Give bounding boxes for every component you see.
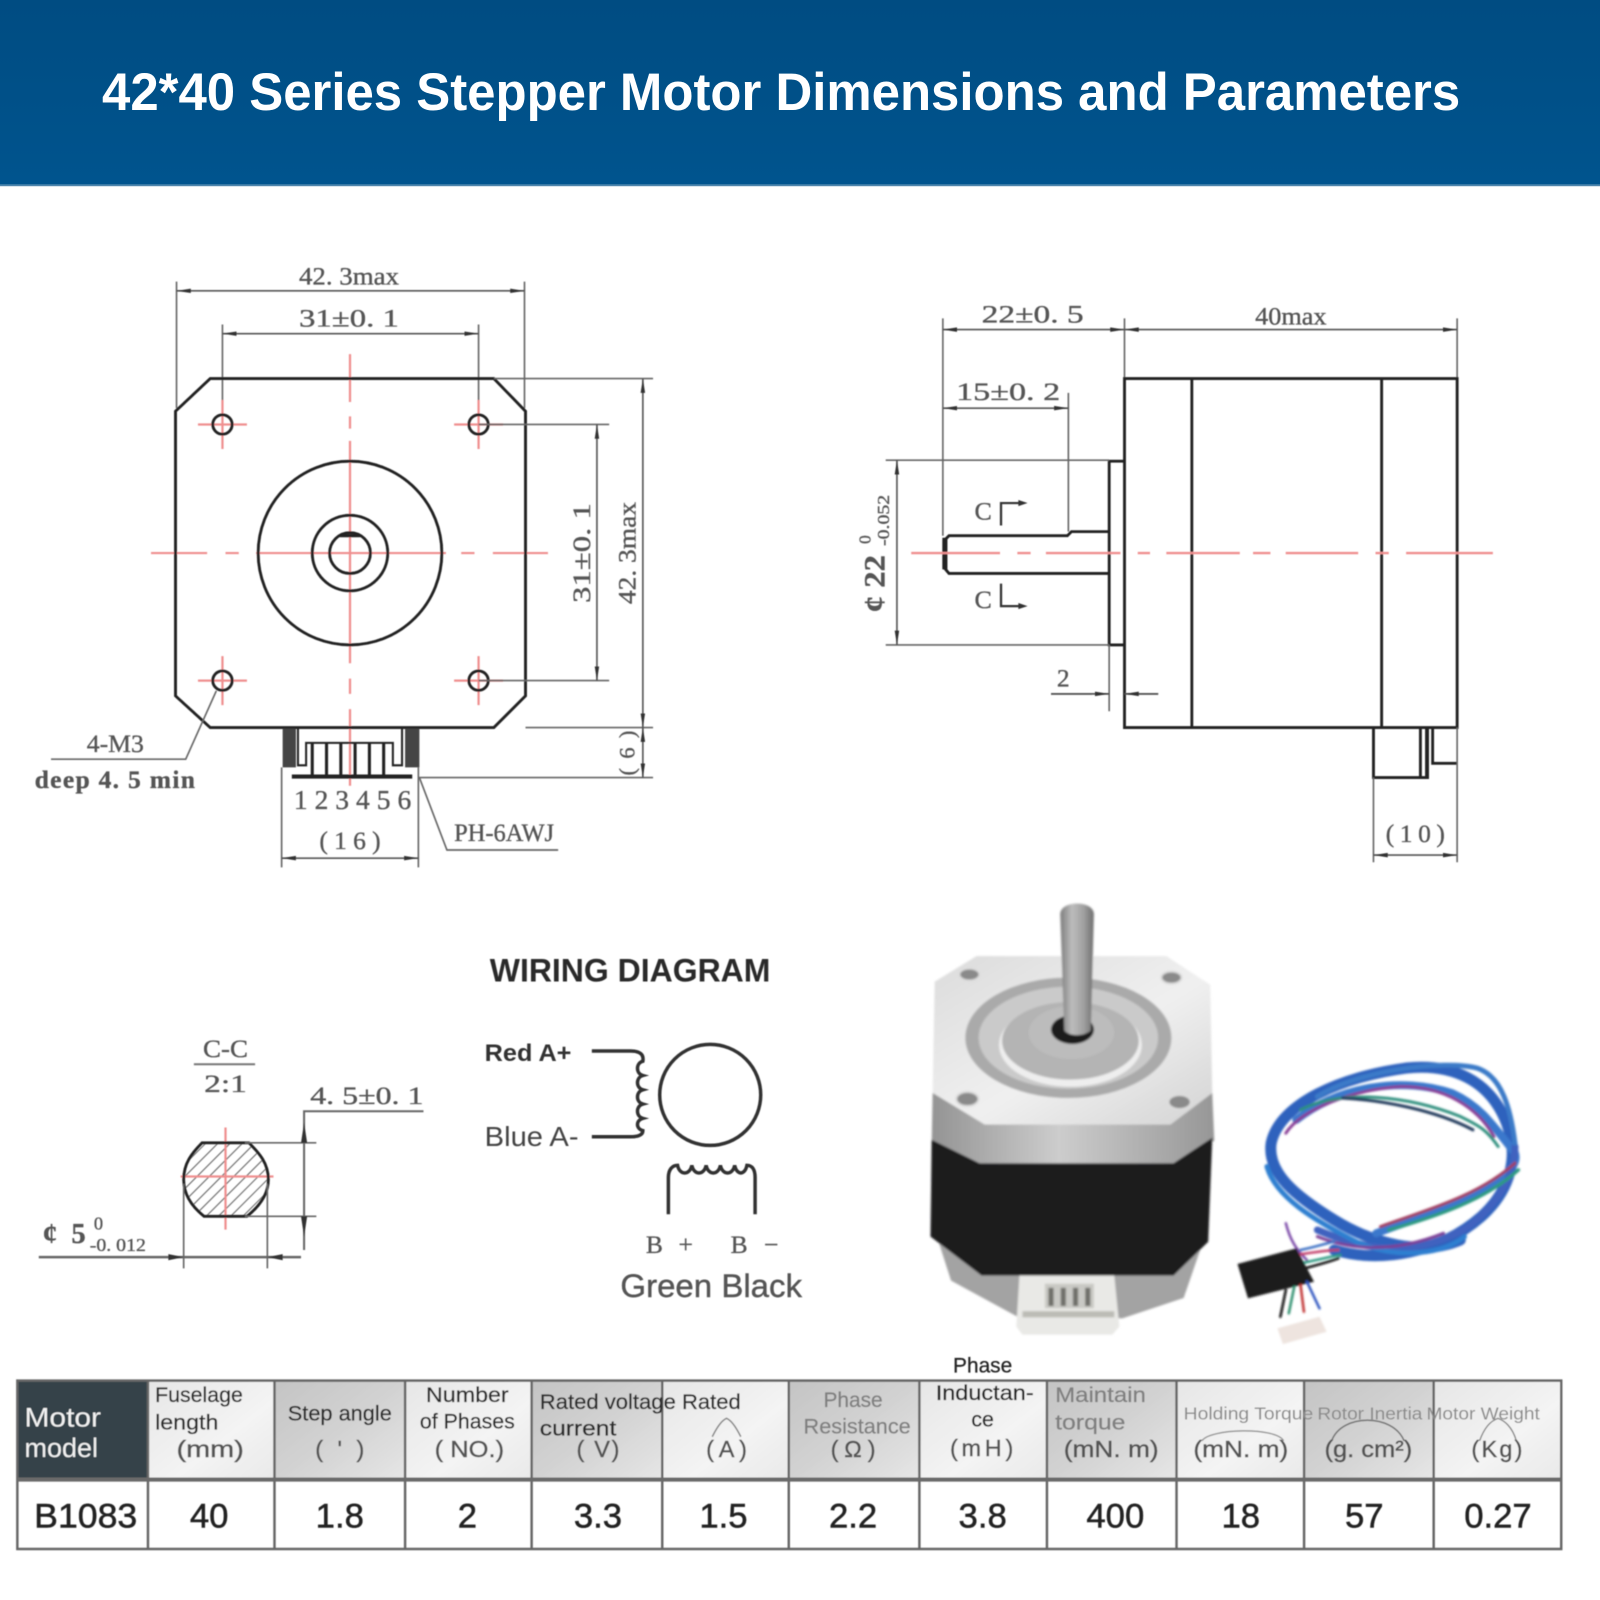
- table values: 2: [458, 1498, 477, 1536]
- header: phase resistance: Resistance: [804, 1415, 911, 1439]
- header: rated voltage: current: [540, 1417, 616, 1441]
- header: maintain torque: (mN. m): [1064, 1436, 1159, 1462]
- header: phase inductance: Phase: [953, 1353, 1012, 1377]
- header: fuselage length: [155, 1383, 244, 1462]
- header: phase resistance: [804, 1388, 911, 1462]
- side view drawing: 40max: [1255, 301, 1327, 330]
- small white connector: [1277, 1317, 1327, 1344]
- header: rated voltage: ( V): [577, 1436, 619, 1462]
- wiring diagram: Blue A-: [485, 1121, 579, 1152]
- screw holes: [956, 968, 1191, 1109]
- side view drawing: C: [974, 585, 992, 614]
- connector: [283, 729, 419, 777]
- header: rated voltage: Rated voltage Rated: [540, 1390, 741, 1414]
- header: holding torque: [1184, 1403, 1313, 1462]
- front view drawing: deep 4. 5 min: [35, 765, 195, 794]
- table values: 18: [1222, 1498, 1260, 1536]
- header: maintain torque: [1055, 1383, 1159, 1462]
- header: maintain torque: Maintain: [1055, 1383, 1146, 1407]
- table grid: [17, 1381, 1561, 1549]
- front view drawing: 123456: [294, 784, 411, 815]
- side view drawing: -0.052: [874, 495, 893, 546]
- header: step angle: ( ' ): [315, 1436, 364, 1462]
- wiring diagram: B −: [731, 1230, 779, 1259]
- table values: 57: [1345, 1498, 1384, 1536]
- header: motor model: [24, 1403, 101, 1463]
- section C-C drawing: 0: [94, 1214, 103, 1234]
- header: phase inductance: Inductan-: [936, 1381, 1034, 1405]
- header: phase inductance: ce: [971, 1408, 994, 1432]
- header: motor weight: Motor Weight: [1427, 1403, 1540, 1423]
- side view drawing: 15±0. 2: [956, 377, 1060, 406]
- header: rated current unit: (A): [706, 1436, 747, 1462]
- table values: 2.2: [829, 1498, 877, 1536]
- front view drawing: (16): [319, 826, 381, 855]
- table values: 1.5: [699, 1498, 748, 1536]
- front view drawing: 42. 3max: [299, 262, 399, 291]
- header: phase inductance: (mH): [950, 1435, 1013, 1461]
- header: motor model: Motor: [24, 1403, 101, 1433]
- header: rotor inertia: (g. cm²): [1324, 1436, 1412, 1462]
- header: rated voltage: [540, 1390, 741, 1462]
- front view drawing: [35, 262, 653, 867]
- table values: 1.8: [316, 1498, 364, 1536]
- table values: 3.8: [959, 1498, 1007, 1536]
- wiring diagram: B +: [646, 1230, 693, 1259]
- section C-C drawing: C-C: [203, 1034, 248, 1063]
- section C-C drawing: [39, 1034, 423, 1268]
- header: number of phases: [420, 1383, 515, 1462]
- table values: 3.3: [574, 1498, 622, 1536]
- header: step angle: Step angle: [288, 1401, 392, 1425]
- wire bundle: [1237, 1065, 1518, 1344]
- header: rotor inertia: [1317, 1403, 1423, 1462]
- header: number of phases: ( NO.): [435, 1436, 504, 1462]
- front view drawing: PH-6AWJ: [454, 818, 554, 847]
- front view drawing: 31±0. 1: [299, 304, 399, 333]
- motor top face: [933, 956, 1212, 1124]
- front view drawing: (6): [615, 731, 640, 776]
- side view drawing: C: [974, 496, 992, 525]
- side view drawing: [855, 299, 1493, 862]
- header: maintain torque: torque: [1055, 1411, 1126, 1435]
- table header cells: [17, 1381, 1561, 1480]
- wiring heading: WIRING DIAGRAM: [490, 952, 770, 989]
- header: motor model: model: [24, 1433, 98, 1463]
- section C-C drawing: ¢ 5: [43, 1219, 86, 1250]
- header: holding torque: Holding Torque: [1184, 1403, 1313, 1423]
- header: step angle: [288, 1401, 392, 1462]
- side view drawing: 22±0. 5: [982, 299, 1084, 328]
- header: rated current unit: [706, 1418, 747, 1462]
- header: fuselage length: (mm): [177, 1436, 244, 1462]
- header: number of phases: Number: [426, 1383, 509, 1407]
- wiring diagram: Red A+: [485, 1040, 571, 1067]
- side view drawing: 2: [1057, 664, 1070, 693]
- front view drawing: 42. 3max: [613, 502, 642, 604]
- table values: 40: [190, 1498, 228, 1536]
- wiring diagram: Green Black: [620, 1267, 803, 1304]
- table values: 400: [1086, 1498, 1144, 1536]
- black connector: [1237, 1248, 1314, 1298]
- header: rotor inertia: Rotor Inertia: [1317, 1403, 1423, 1423]
- header: phase resistance: (Ω): [831, 1436, 876, 1462]
- wiring diagram: [485, 952, 803, 1304]
- front view drawing: 4-M3: [87, 729, 144, 758]
- header: fuselage length: Fuselage: [155, 1383, 243, 1407]
- side view drawing: ¢ 22: [860, 555, 892, 612]
- header: fuselage length: length: [155, 1411, 218, 1435]
- motor body lower: [935, 1230, 1206, 1318]
- motor connector: [1016, 1276, 1119, 1335]
- motor shaft: [1060, 904, 1094, 1035]
- front view drawing: 31±0. 1: [567, 503, 596, 603]
- section C-C drawing: -0. 012: [90, 1235, 146, 1255]
- header: motor weight: (Kg): [1471, 1436, 1522, 1462]
- section C-C drawing: 2:1: [204, 1069, 247, 1098]
- section C-C drawing: 4. 5±0. 1: [310, 1081, 423, 1110]
- header: holding torque: (mN. m): [1193, 1436, 1288, 1462]
- header banner: [0, 0, 1600, 186]
- header: motor weight: [1427, 1403, 1540, 1462]
- side view drawing: (10): [1386, 819, 1445, 848]
- table values: [34, 1498, 1532, 1536]
- header: phase inductance: [936, 1353, 1034, 1461]
- table values: B1083: [34, 1498, 137, 1536]
- table values: 0.27: [1464, 1498, 1532, 1536]
- stepper motor photo: [931, 904, 1518, 1344]
- header: phase resistance: Phase: [823, 1388, 883, 1412]
- header: number of phases: of Phases: [420, 1410, 515, 1434]
- side view drawing: 0: [855, 535, 874, 544]
- title: 42*40 Series Stepper Motor Dimensions and Parameters: [102, 63, 1460, 122]
- parameter table: [17, 1353, 1561, 1549]
